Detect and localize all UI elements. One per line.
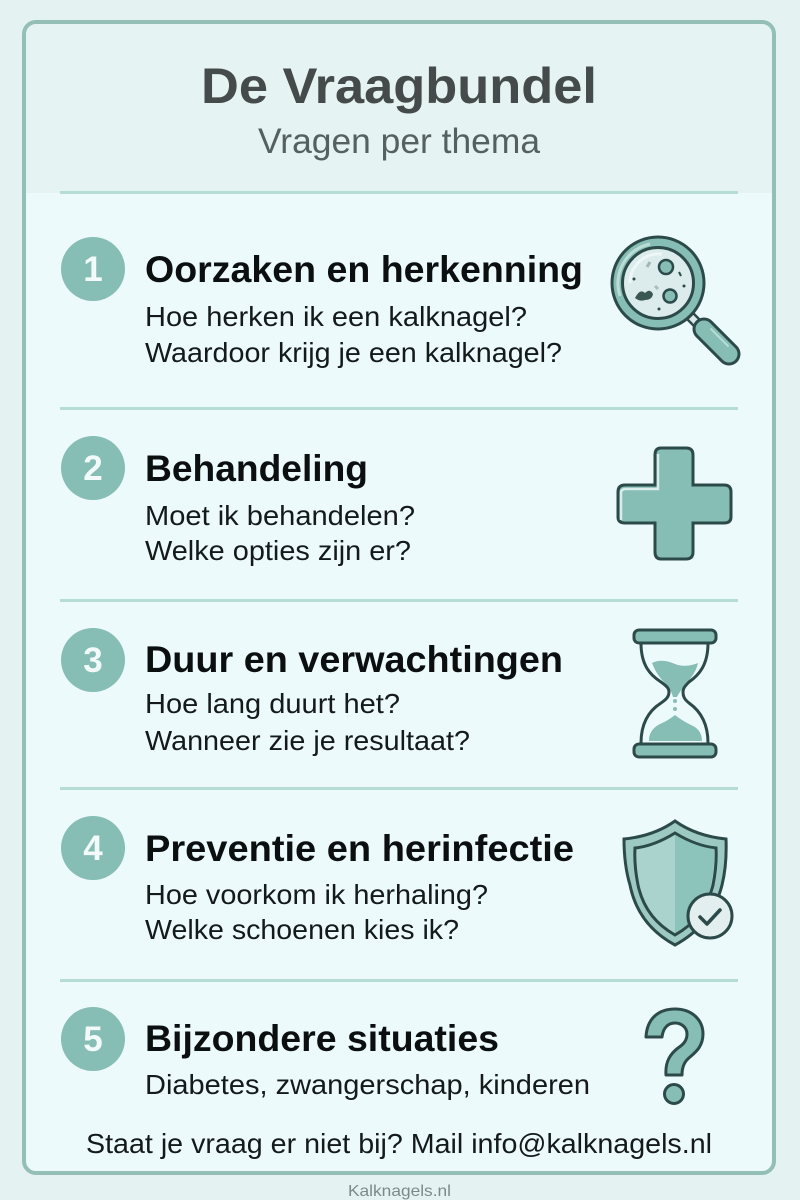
number badge 4: 4: [83, 829, 103, 868]
questions 4: Hoe voorkom ik herhaling?: [145, 879, 488, 910]
number badge 5: [61, 1007, 125, 1071]
section 4: preventie en herinfectie: [61, 816, 732, 945]
questions 4: [145, 879, 488, 945]
number badge 2: [61, 436, 125, 500]
questions 3: [145, 688, 470, 756]
heading 3: Duur en verwachtingen: [145, 639, 563, 680]
questions 2: Welke opties zijn er?: [145, 535, 411, 566]
source credit: Kalknagels.nl: [348, 1183, 451, 1200]
questions 4: Welke schoenen kies ik?: [145, 914, 459, 945]
section 1: oorzaken en herkenning: [61, 237, 729, 368]
heading 5: Bijzondere situaties: [145, 1018, 499, 1059]
footer call to action: Staat je vraag er niet bij? Mail info@kalknagels.nl: [86, 1128, 712, 1159]
number badge 2: 2: [83, 449, 103, 488]
number badge 4: [61, 816, 125, 880]
questions 1: Hoe herken ik een kalknagel?: [145, 301, 527, 332]
number badge 1: [61, 237, 125, 301]
questions 1: Waardoor krijg je een kalknagel?: [145, 337, 562, 368]
questions 2: Moet ik behandelen?: [145, 500, 415, 531]
icon: magnifying glass: [612, 237, 729, 354]
section 3: duur en verwachtingen: [61, 628, 716, 757]
questions 5: Diabetes, zwangerschap, kinderen: [145, 1069, 590, 1100]
number badge 3: [61, 628, 125, 692]
number badge 1: 1: [83, 250, 103, 289]
title: De Vraagbundel: [201, 58, 597, 114]
heading 2: Behandeling: [145, 448, 368, 489]
icon: question mark: [646, 1009, 703, 1104]
icon: hourglass: [634, 630, 716, 757]
number badge 3: 3: [83, 641, 103, 680]
questions 2: [145, 500, 415, 566]
heading 1: Oorzaken en herkenning: [145, 249, 583, 290]
questions 3: Wanneer zie je resultaat?: [145, 725, 470, 756]
heading 4: Preventie en herinfectie: [145, 828, 574, 869]
number badge 5: 5: [83, 1020, 103, 1059]
section 2: behandeling: [61, 436, 731, 566]
icon: medical cross: [618, 448, 731, 559]
icon: shield with check: [624, 821, 732, 945]
questions 1: [145, 301, 562, 368]
section 5: bijzondere situaties: [61, 1007, 703, 1104]
subtitle: Vragen per thema: [258, 122, 541, 161]
questions 3: Hoe lang duurt het?: [145, 688, 400, 719]
